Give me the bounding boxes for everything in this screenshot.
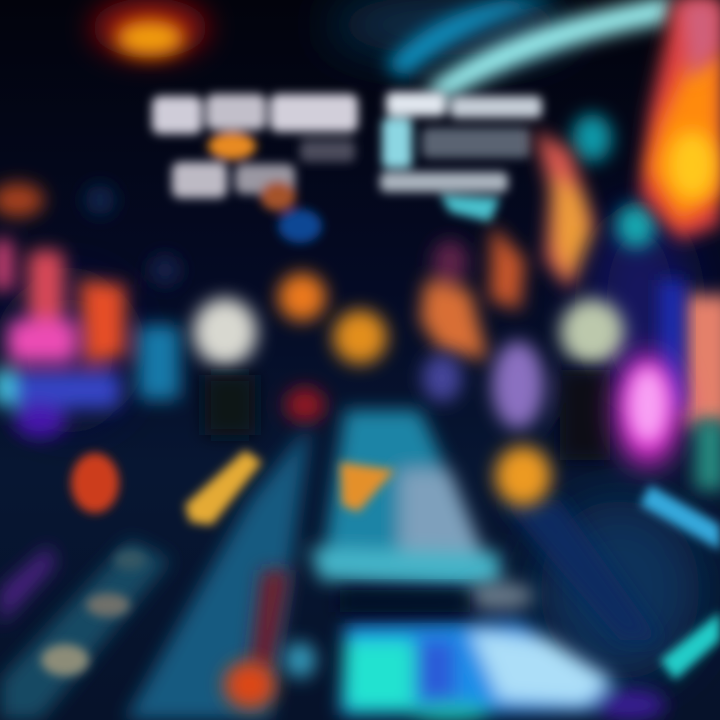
icon: pale orb right bbox=[560, 299, 624, 365]
icon: orange triangle on floor bbox=[340, 462, 395, 512]
banner: right flame bbox=[640, 0, 720, 240]
floor lanes bbox=[0, 410, 660, 720]
icon: orange orb top bbox=[278, 273, 326, 321]
red stripe and lamp bbox=[224, 570, 316, 709]
icon: orange orb right floor bbox=[495, 446, 551, 506]
flags: centre right bbox=[420, 130, 595, 360]
icon: white orb left bbox=[193, 298, 257, 366]
panel: glowing screen bottom bbox=[340, 582, 666, 720]
floor tokens: left lane bbox=[41, 450, 262, 676]
pillar: lilac figure bbox=[205, 341, 610, 460]
title: blurred lettering bbox=[152, 92, 542, 243]
panel: right neon signs bbox=[616, 280, 720, 680]
dark band above screen bbox=[340, 590, 470, 612]
icon: orange orb middle bbox=[333, 310, 387, 364]
left wall: neon arcade signs bbox=[0, 183, 180, 438]
light streaks: top right bbox=[385, 0, 672, 248]
glow: top lamp bbox=[92, 0, 208, 58]
